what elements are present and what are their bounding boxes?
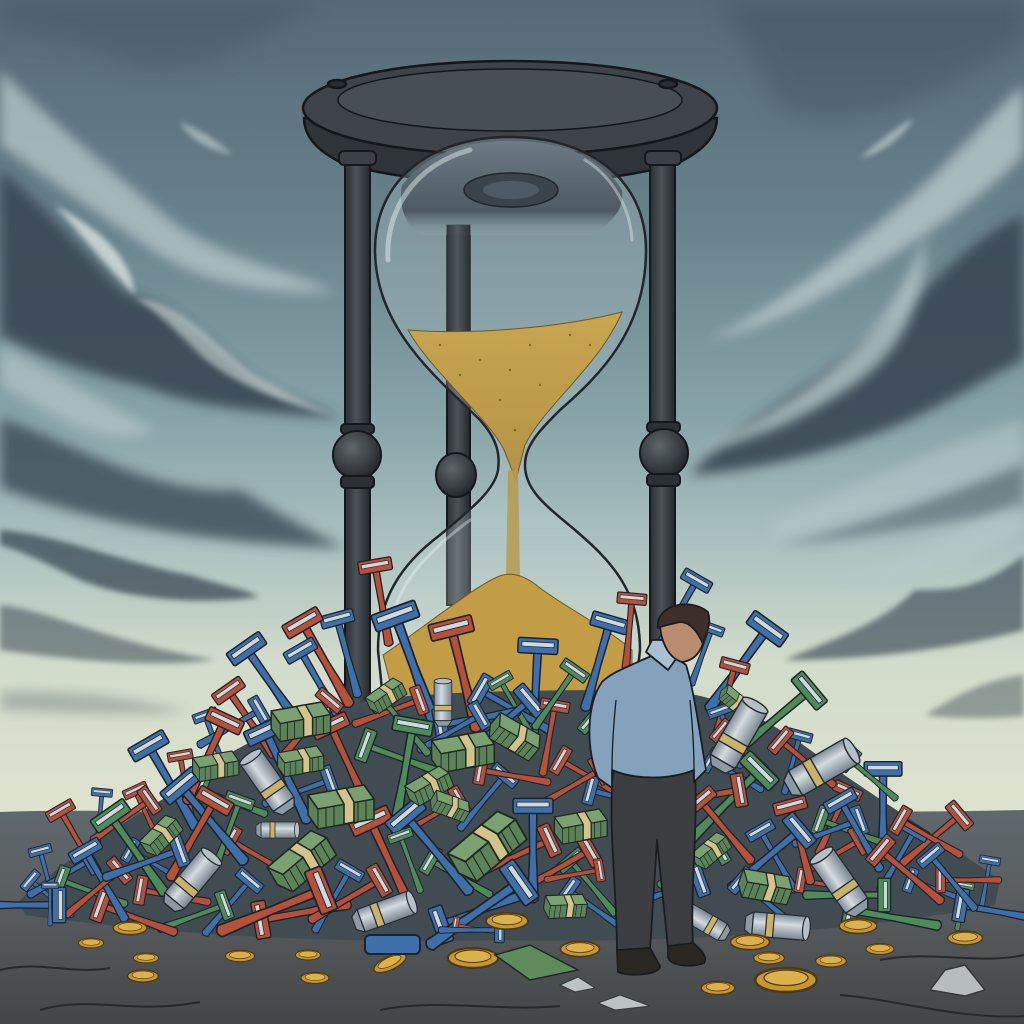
crumpled banknotes [495,945,578,980]
back row of razors [20,557,1001,932]
ground [0,810,1024,1024]
lower sand pile [383,574,632,720]
left column [333,151,381,730]
shoes [617,943,705,975]
money bundles [136,676,796,924]
glass body [375,137,646,720]
pile base shadow [20,690,1000,941]
clouds: bright rims [55,205,335,415]
clouds: dark masses [0,0,1024,718]
upper sand [408,312,622,480]
man standing with head bowed [589,604,709,975]
trousers [611,770,696,952]
top plate [303,61,717,183]
middle razors [0,658,988,943]
sweater [589,650,706,788]
falling sand stream [506,470,520,578]
clouds: light streaks [0,70,1024,586]
head [660,612,704,662]
blue bottle cap [365,935,420,954]
rock debris [930,965,985,996]
plate underside seen through glass [401,141,622,335]
shirt collar [646,640,684,670]
glass highlights [388,150,632,620]
hourglass [303,61,717,730]
rear column [436,225,476,605]
razor and bundle pile [0,557,1024,966]
paper scrap [560,977,650,1010]
canisters [160,678,873,944]
coins and litter on the ground [78,913,985,1010]
right column [640,151,688,650]
hair [658,604,709,644]
front razors [42,798,606,966]
filler razors packing the pile [20,670,1024,949]
sand specks [429,334,591,651]
